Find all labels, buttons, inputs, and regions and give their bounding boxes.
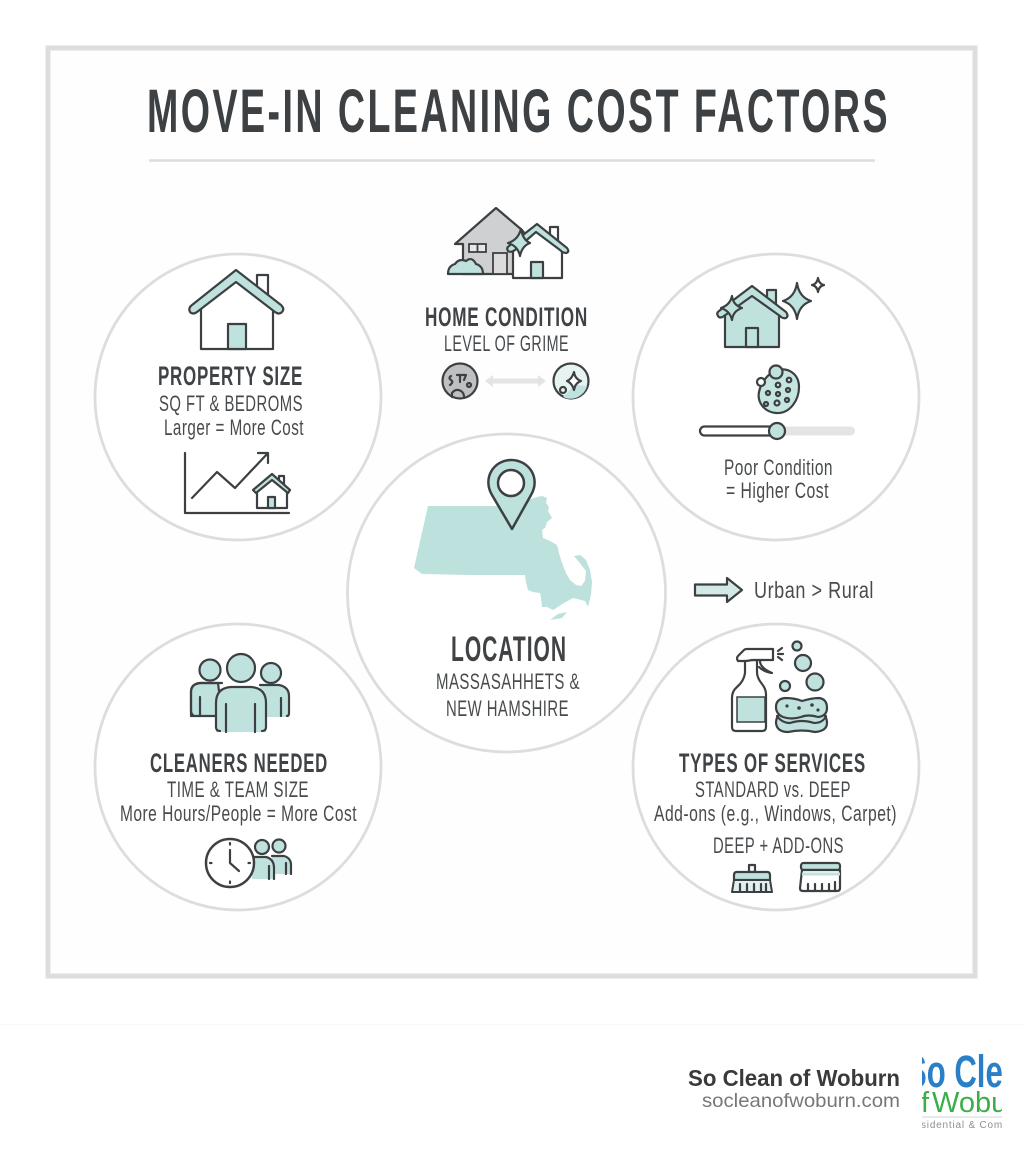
icon: rising cost chart with house <box>185 453 290 513</box>
icon: spray bottle <box>732 648 783 731</box>
icon: house <box>189 270 283 349</box>
text: poor condition higher cost <box>724 455 833 503</box>
text: more hours more cost: More Hours/People = More Cost <box>120 801 357 826</box>
text: poor condition higher cost: = Higher Cost <box>726 478 829 503</box>
subheading: square feet and bedrooms: SQ FT & BEDROMS <box>159 391 303 416</box>
subheading: service states: NEW HAMSHIRE <box>446 696 569 721</box>
text: deep plus add-ons: DEEP + ADD-ONS <box>713 833 844 858</box>
text: poor condition higher cost: Poor Condition <box>724 455 833 480</box>
infographic frame <box>48 48 975 976</box>
text: website: socleanofwoburn.com <box>702 1090 900 1112</box>
arrow: urban to rural <box>695 578 742 602</box>
subheading: standard versus deep: STANDARD vs. DEEP <box>695 777 851 802</box>
heading: types of services: TYPES OF SERVICES <box>679 748 866 778</box>
icon: location pin <box>488 460 535 529</box>
subheading: service states <box>436 669 580 721</box>
icon: clock and people <box>206 839 291 887</box>
text: urban greater than rural: Urban > Rural <box>754 577 874 603</box>
heading: cleaners needed: CLEANERS NEEDED <box>150 748 328 778</box>
subheading: time and team size: TIME & TEAM SIZE <box>167 777 309 802</box>
panel: location <box>348 434 666 752</box>
text: add-ons: Add-ons (e.g., Windows, Carpet) <box>654 801 897 826</box>
arrow: dirty to clean <box>485 375 546 387</box>
panel: types of services <box>633 624 919 910</box>
footer <box>0 1024 1024 1154</box>
heading: home condition: HOME CONDITION <box>425 302 588 332</box>
icon: sponge <box>776 698 827 732</box>
icon: clean sparkle circle <box>554 364 588 399</box>
subheading: service states: MASSASAHHETS & <box>436 669 580 694</box>
icon: team of people <box>191 654 289 732</box>
subheading: level of grime: LEVEL OF GRIME <box>444 331 569 356</box>
icon: sparkling house <box>717 278 824 347</box>
panel: condition cost <box>633 254 919 540</box>
icon: scrub brush <box>732 865 772 892</box>
heading: property size: PROPERTY SIZE <box>158 361 303 391</box>
heading: location: LOCATION <box>451 630 567 669</box>
logo: cropped company logo <box>906 1046 1024 1131</box>
icon: dirty sponge <box>757 366 799 413</box>
icon: bubbles <box>780 642 824 691</box>
logo: cropped company logo: f <box>921 1087 929 1119</box>
icon: grimy circle <box>442 364 478 398</box>
text: company name: So Clean of Woburn <box>688 1065 900 1091</box>
panel: property size <box>95 254 381 540</box>
text: larger means more cost: Larger = More Cost <box>164 415 304 440</box>
panel: home condition <box>425 208 588 399</box>
slider: condition level <box>700 423 855 439</box>
icon: hand brush <box>800 863 840 891</box>
icon: dirty and clean houses <box>448 208 568 278</box>
callout: urban versus rural <box>695 577 874 603</box>
panel: cleaners needed <box>95 624 381 910</box>
map: Massachusetts <box>414 496 592 620</box>
